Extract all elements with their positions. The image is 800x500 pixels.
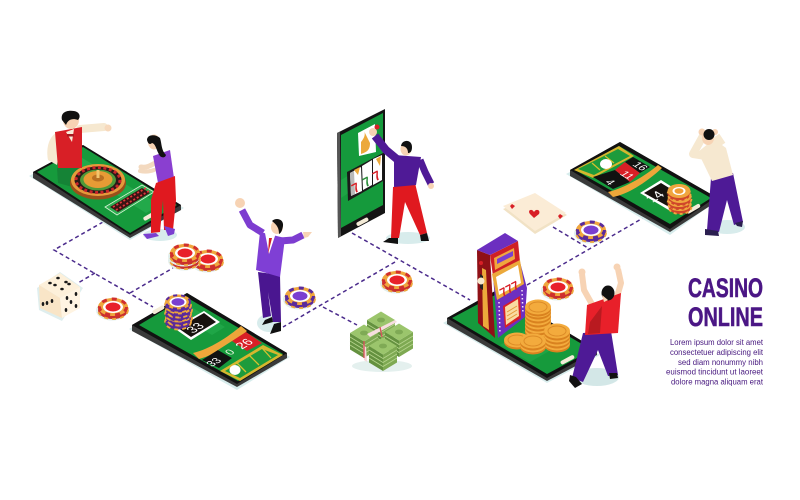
body text: Lorem ipsum dolor sit amet (670, 338, 764, 347)
purple chip stack (165, 294, 192, 330)
female player (140, 134, 177, 241)
wheel arc and numbers: 33 (204, 356, 225, 369)
panel: roulette phone top right (566, 128, 745, 236)
icon: pair of red chips (168, 244, 223, 272)
icon: purple chip right (574, 221, 606, 244)
icon: stacks of money (350, 312, 413, 372)
phone 3 body (337, 109, 385, 238)
figure: worried man (693, 128, 745, 236)
dealer (47, 111, 112, 168)
phone 5 body (566, 142, 719, 235)
betting table (105, 185, 154, 215)
wheel arc and numbers (574, 146, 662, 197)
title: ONLINE (688, 302, 763, 332)
wheel arc and numbers (193, 326, 283, 381)
body text: euismod tincidunt ut laoreet (666, 368, 764, 376)
icon: playing card (503, 193, 567, 234)
phone 1 body (29, 145, 184, 240)
figure: cheering man in red (569, 264, 621, 388)
bet box 14 (640, 180, 688, 212)
panel: slot machine phone (443, 233, 600, 383)
bet box 14: 14 (641, 188, 668, 204)
gold coins (504, 300, 570, 354)
panel: vertical slot phone (337, 109, 434, 244)
title: CASINO (688, 273, 763, 303)
roulette wheel (70, 164, 126, 200)
bet box 33 (174, 311, 220, 340)
body text: consectetuer adipiscing elit (670, 348, 764, 357)
icon: red chip center (380, 271, 412, 294)
wheel arc and numbers: 16 (629, 160, 650, 173)
figure: man pressing phone (369, 124, 434, 244)
slot reels on screen: 7 (370, 167, 383, 184)
orange chip stack (668, 184, 692, 214)
wheel arc and numbers: 26 (231, 336, 257, 351)
phone 4 body (443, 290, 600, 383)
translucent dealer lower body (57, 166, 82, 188)
slot reels on screen: 7 (360, 173, 373, 190)
wheel arc and numbers: 4 (602, 178, 617, 187)
wheel arc and numbers: 0 (223, 348, 238, 357)
slot reels on screen: 7 (349, 179, 362, 196)
slot reels on screen (347, 153, 383, 201)
icon: red chip right (541, 278, 573, 300)
icon: purple chip center (283, 287, 315, 310)
body text (666, 338, 764, 386)
body text: sed diam nonummy nibh (678, 358, 763, 367)
phone 2 body (129, 293, 290, 390)
panel: roulette wheel phone with dealer and player (29, 111, 184, 241)
icon: red chip left (96, 298, 128, 320)
bet box 33: 33 (182, 320, 208, 335)
title (688, 273, 763, 332)
figure: man in purple suit (235, 198, 312, 334)
card on screen (358, 124, 376, 156)
icon: dice (37, 272, 83, 321)
wheel arc and numbers: 11 (617, 170, 637, 181)
slot machine: 777 (497, 278, 522, 300)
dashed connector lines (54, 218, 643, 327)
body text: dolore magna aliquam erat (671, 378, 764, 386)
slot machine (477, 233, 527, 338)
panel: roulette phone bottom left (129, 293, 290, 390)
